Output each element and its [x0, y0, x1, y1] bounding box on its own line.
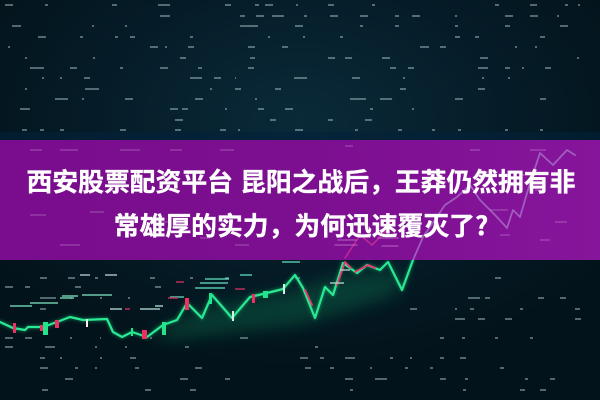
title: [27, 168, 575, 243]
green glow under chart: [150, 270, 405, 340]
chart visible through band: [30, 145, 576, 260]
line chart: [0, 260, 413, 337]
candlesticks: [13, 284, 285, 339]
purple title band: [0, 140, 600, 260]
title: 西安股票配资平台 昆阳之战后，王莽仍然拥有非: [27, 169, 575, 197]
chart annotation labels: [10, 262, 350, 309]
title: 常雄厚的实力，为何迅速覆灭了?: [114, 206, 488, 243]
